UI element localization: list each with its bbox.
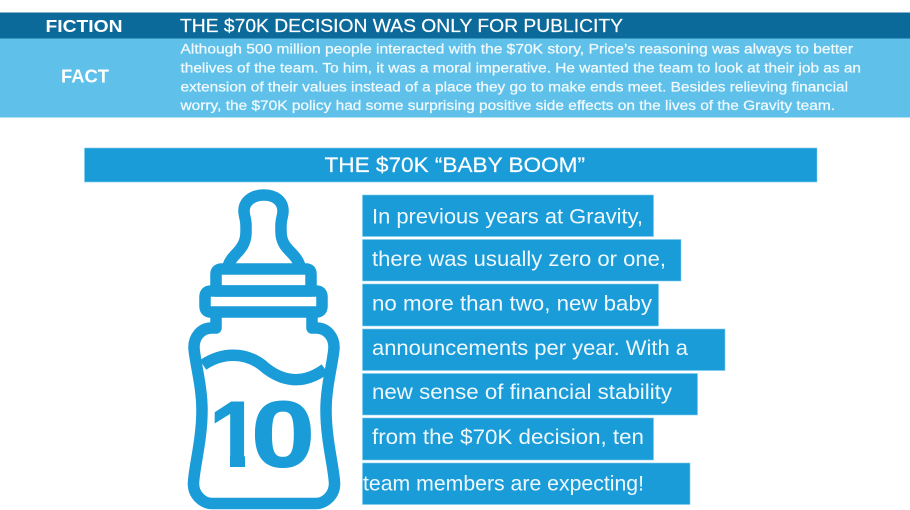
- line 5: new sense of financial stability: [372, 380, 672, 404]
- heading: baby boom banner: THE $70K “BABY BOOM”: [324, 154, 585, 177]
- collar ring upper: [216, 269, 311, 291]
- line 1: In previous years at Gravity,: [372, 204, 643, 228]
- collar ring lower: [205, 291, 322, 312]
- fact paragraph: extension of their values instead of a place they go to make ends meet. Besides relieving financial: [180, 80, 848, 94]
- line 4: announcements per year. With a: [372, 336, 688, 360]
- line 3: no more than two, new baby: [372, 292, 652, 316]
- fact paragraph: [179, 42, 861, 113]
- fact paragraph: Although 500 million people interacted with the $70K story, Price’s reasoning was always to better: [180, 42, 854, 56]
- number 10: 1: [209, 382, 261, 486]
- line 6: from the $70K decision, ten: [372, 425, 644, 449]
- panel: fiction row: [0, 12, 910, 38]
- line 2: [362, 240, 681, 281]
- bottle body: [193, 314, 335, 504]
- nipple: [228, 195, 300, 266]
- fiction label: FICTION: [46, 16, 122, 36]
- fiction statement: THE $70K DECISION WAS ONLY FOR PUBLICITY: [180, 16, 623, 36]
- line 5: [362, 374, 698, 415]
- panel: fact row: [0, 38, 910, 118]
- fact paragraph: worry, the $70K policy had some surprising positive side effects on the lives of the Gravity team.: [179, 98, 835, 113]
- line 7: [362, 463, 690, 504]
- heading: baby boom banner: [84, 148, 817, 182]
- line 1: [362, 195, 654, 236]
- fact label: FACT: [61, 66, 109, 86]
- line 3: [362, 284, 658, 326]
- line 4: [362, 329, 725, 370]
- milk level wave: [203, 355, 325, 380]
- line 7: team members are expecting!: [363, 472, 644, 496]
- text block: staggered strips: [362, 195, 725, 504]
- number 10: 0: [251, 382, 315, 486]
- line 2: there was usually zero or one,: [372, 247, 666, 271]
- number 10: [205, 382, 315, 486]
- fact paragraph: thelives of the team. To him, it was a moral imperative. He wanted the team to look at their job as an: [180, 60, 861, 76]
- line 6: [362, 418, 654, 460]
- icon: baby bottle with number 10: [193, 195, 335, 504]
